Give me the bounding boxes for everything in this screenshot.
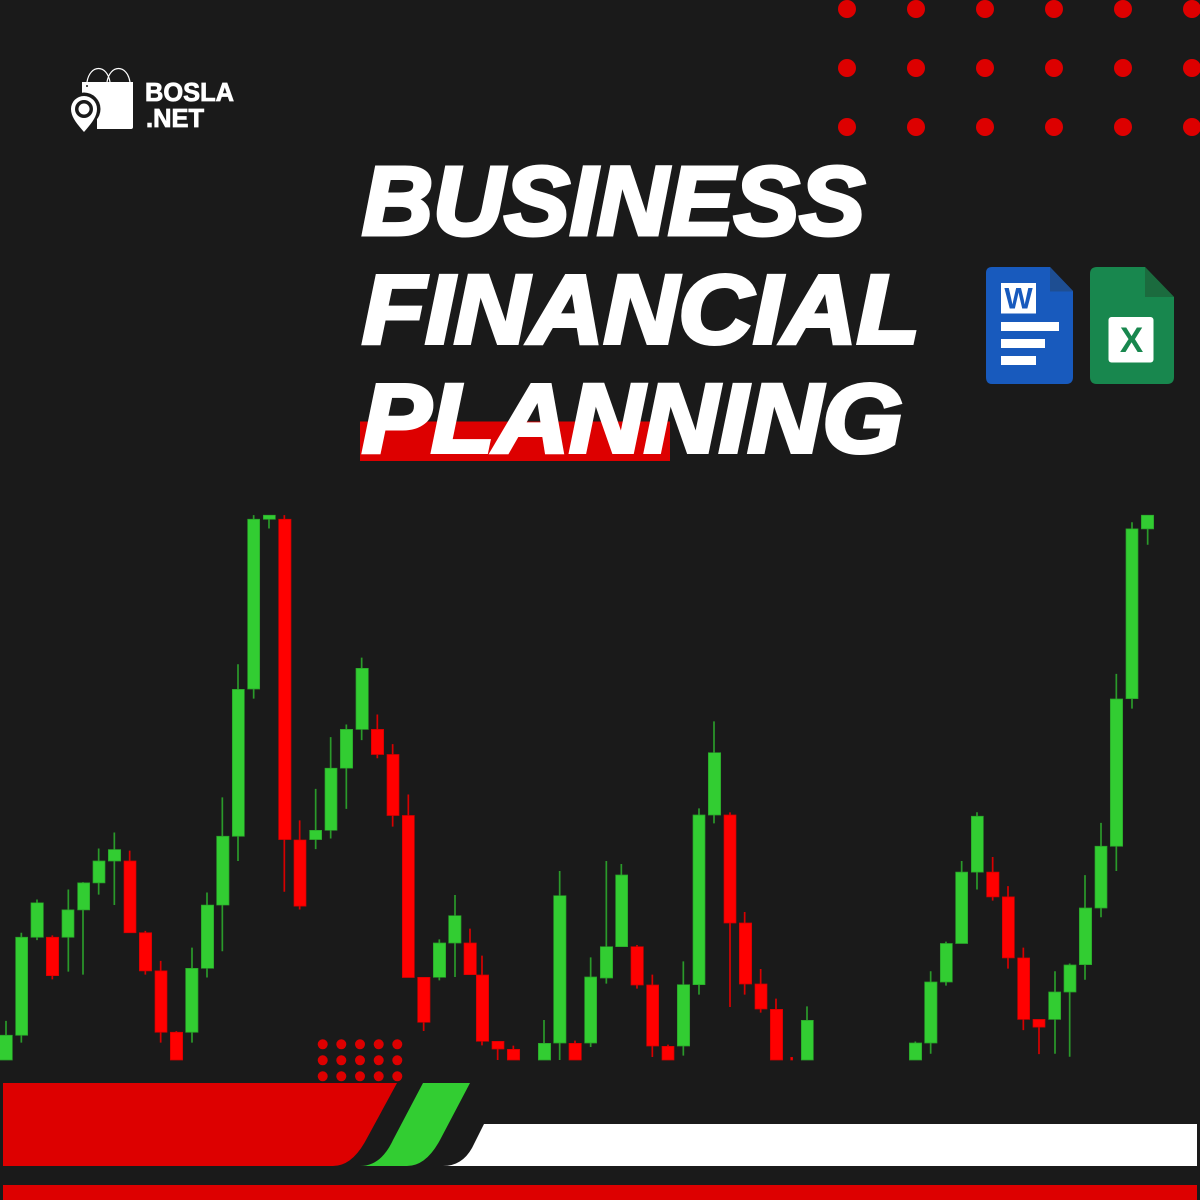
icon: Excel document: X bbox=[1120, 321, 1144, 360]
candles: middle section bbox=[418, 721, 813, 1060]
title: BUSINESS bbox=[362, 146, 865, 256]
candles: right section bbox=[909, 515, 1154, 1060]
logo: Bosla.net bbox=[68, 68, 234, 133]
footer band: green bbox=[360, 1083, 470, 1166]
footer bar: red bbox=[3, 1185, 1197, 1200]
title bbox=[362, 146, 920, 473]
footer band: red bbox=[3, 1083, 397, 1166]
dot grid: bottom bbox=[318, 1039, 402, 1081]
logo text: BOSLA bbox=[145, 79, 234, 107]
candlestick chart bbox=[0, 515, 1154, 1060]
logo text: .NET bbox=[146, 105, 204, 133]
title underline highlight bbox=[360, 422, 670, 461]
logo text bbox=[145, 79, 234, 133]
title: PLANNING bbox=[362, 364, 903, 473]
icon: shopping bag with location pin bbox=[68, 68, 133, 132]
footer band: white bbox=[443, 1124, 1197, 1166]
icon: Excel document bbox=[1090, 267, 1174, 384]
dot grid: top right bbox=[838, 0, 1200, 136]
candles: left section bbox=[0, 515, 414, 1060]
icon: Word document bbox=[986, 267, 1073, 384]
icon: Word document: W bbox=[1004, 282, 1033, 316]
title: FINANCIAL bbox=[362, 255, 920, 364]
